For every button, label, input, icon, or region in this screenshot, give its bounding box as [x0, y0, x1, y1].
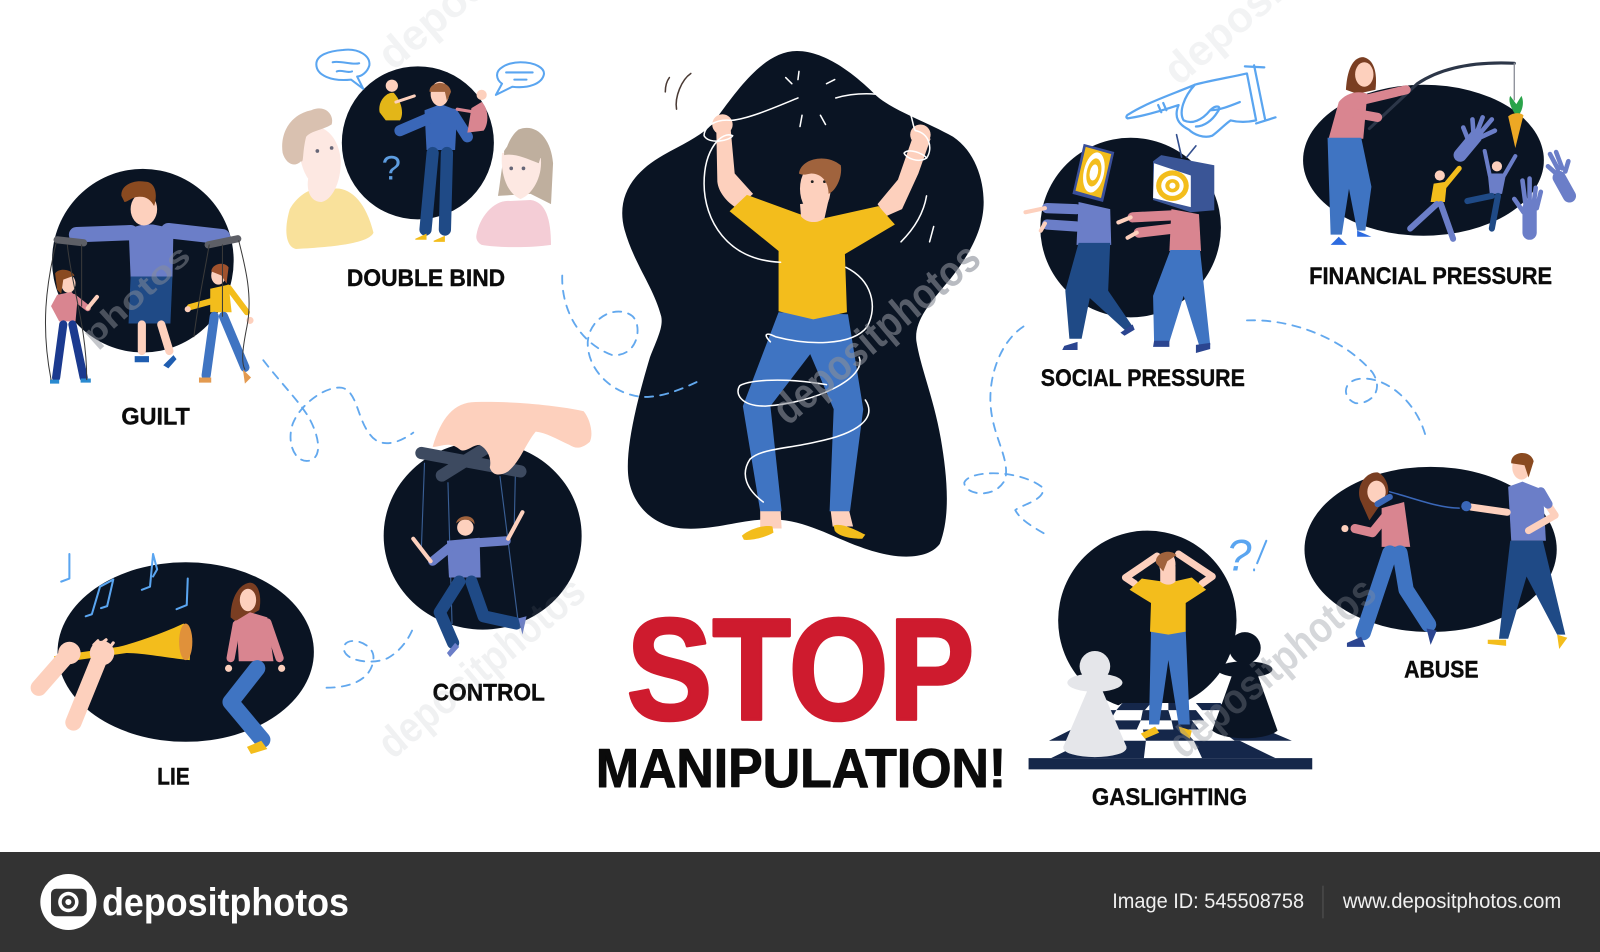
ropes — [704, 98, 798, 262]
fishing rod with carrot — [1369, 63, 1514, 129]
logo wordmark: depositphotos — [102, 881, 349, 924]
image id: Image ID: 545508758 — [1112, 889, 1304, 913]
golden horn — [54, 623, 191, 663]
label: DOUBLE BIND: DOUBLE BIND — [347, 265, 505, 292]
big pale head right — [476, 128, 553, 247]
label: GASLIGHTING: GASLIGHTING — [1092, 784, 1247, 811]
label: LIE: LIE — [157, 764, 190, 791]
label: SOCIAL PRESSURE: SOCIAL PRESSURE — [1041, 365, 1245, 392]
logo icon: camera — [40, 874, 96, 930]
footer banner — [0, 852, 1600, 952]
panel: gaslighting — [1029, 529, 1312, 811]
title: MANIPULATION!: MANIPULATION! — [596, 737, 1006, 799]
purple hand right — [1548, 152, 1569, 196]
lie ellipse — [58, 562, 314, 742]
panel: social pressure — [1026, 65, 1276, 392]
big pale head left — [282, 108, 373, 249]
giant hand — [433, 402, 591, 475]
purple hand lower — [1514, 179, 1541, 233]
person with TV head — [1118, 135, 1214, 353]
marionette man — [185, 264, 254, 384]
label: CONTROL: CONTROL — [433, 679, 545, 706]
pointing hand outline — [1126, 65, 1276, 137]
gaslighting circle — [1058, 531, 1237, 710]
panel: control — [384, 402, 591, 706]
speech bubble left — [316, 50, 369, 89]
watermarks: depositphotos — [1159, 567, 1386, 768]
panel: abuse — [1304, 453, 1567, 684]
person with tablet head — [1026, 144, 1135, 350]
watermarks: photos — [76, 238, 197, 352]
puppet strings — [421, 463, 518, 623]
small blue figure — [1467, 151, 1515, 229]
watermarks: depositphotos — [763, 233, 990, 434]
leash — [1390, 492, 1459, 508]
panel: guilt — [45, 169, 254, 430]
dashed connector: guilt to control — [263, 360, 413, 461]
white pawn — [1063, 651, 1127, 757]
black pawn — [1212, 632, 1278, 738]
financial pressure ellipse — [1303, 85, 1544, 236]
guilt circle — [52, 169, 234, 353]
title: STOP: STOP — [627, 588, 974, 750]
speech bubble right — [496, 62, 544, 95]
large reaching hand — [1460, 117, 1495, 155]
man — [712, 114, 931, 540]
double bind circle — [342, 66, 494, 219]
puppet man — [413, 512, 527, 657]
small yellow figure — [1410, 168, 1459, 239]
label: GUILT: GUILT — [121, 403, 190, 430]
puppet strings — [45, 241, 249, 380]
man with hand puppets — [379, 80, 487, 242]
man holding leash — [1461, 453, 1567, 649]
panel: central figure tied with ropes — [622, 51, 984, 557]
panel: lie — [39, 554, 314, 791]
question mark: ? — [382, 150, 401, 188]
label: FINANCIAL PRESSURE: FINANCIAL PRESSURE — [1309, 263, 1552, 290]
dashed connector: lie to control — [327, 625, 414, 688]
confused man — [1126, 552, 1212, 739]
control circle — [384, 442, 582, 630]
abuse ellipse — [1304, 467, 1557, 632]
motion marks — [665, 73, 691, 109]
question and exclamation marks: ? — [1227, 529, 1252, 580]
dashed connector: social pressure to gaslighting — [964, 327, 1048, 536]
dark central blob — [622, 51, 984, 557]
social pressure circle — [1040, 138, 1221, 317]
website: www.depositphotos.com — [1342, 889, 1561, 913]
watermarks — [76, 0, 1386, 768]
dashed connector: financial pressure to abuse — [1247, 320, 1427, 440]
woman with rod — [1328, 57, 1406, 245]
leashed woman — [1341, 472, 1437, 647]
puppeteer man — [57, 181, 238, 368]
marionette cross — [421, 447, 520, 475]
label: ABUSE: ABUSE — [1404, 657, 1479, 684]
music notes — [61, 554, 188, 616]
hands holding horn — [39, 640, 114, 722]
marionette girl — [50, 270, 97, 384]
chess board — [1029, 703, 1312, 769]
dashed connector: double bind to centre — [562, 275, 702, 397]
frightened woman — [225, 583, 285, 754]
watermarks: depositphotos — [368, 567, 595, 768]
panel: double bind — [282, 50, 553, 292]
panel: financial pressure — [1303, 57, 1569, 290]
